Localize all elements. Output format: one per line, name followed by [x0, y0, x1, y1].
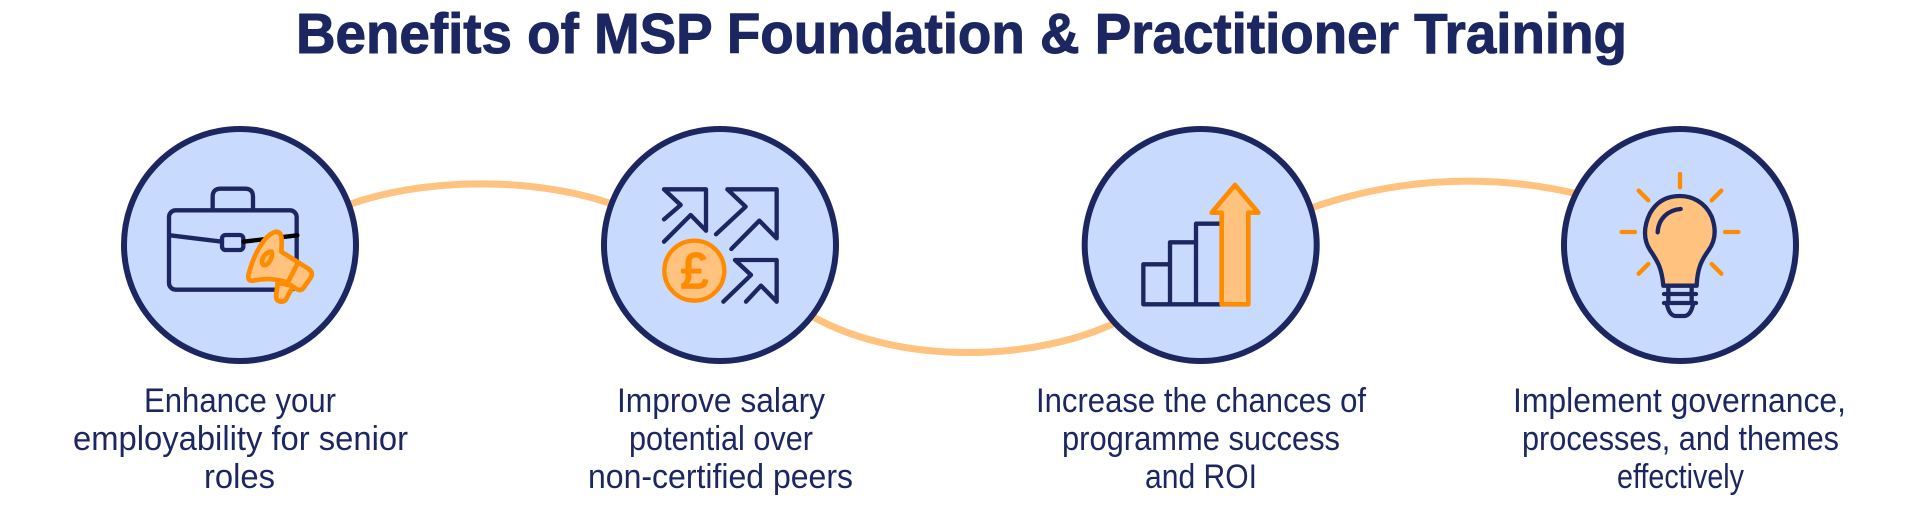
title: Benefits of MSP Foundation & Practitioner Training	[296, 2, 1627, 66]
text: programme success	[1036, 382, 1366, 496]
text: salary: Improve salary	[617, 382, 825, 420]
circle	[1564, 129, 1796, 361]
panel: salary	[588, 129, 853, 496]
icon: briefcase with megaphone	[169, 189, 312, 302]
text: employability: roles	[204, 458, 275, 496]
text: programme success: and ROI	[1145, 458, 1257, 496]
circle	[124, 129, 356, 361]
circle	[1085, 129, 1317, 361]
text: programme success: Increase the chances of	[1036, 382, 1366, 420]
text: employability: Enhance your	[144, 382, 336, 420]
text: programme success: programme success	[1062, 420, 1340, 458]
connector curves	[340, 181, 1590, 353]
text: employability: employability for senior	[73, 420, 408, 458]
panel: programme success	[1036, 129, 1366, 496]
text: governance: processes, and themes	[1522, 420, 1839, 458]
text: governance: Implement governance,	[1513, 382, 1846, 420]
icon: bar chart with arrow	[1143, 185, 1258, 304]
text: employability	[73, 382, 408, 496]
icon: arrows and pound coin: £	[680, 243, 708, 299]
text: governance: effectively	[1617, 458, 1744, 496]
panel: employability	[73, 129, 408, 496]
text: salary	[588, 382, 853, 496]
panel: governance	[1513, 129, 1846, 496]
text: salary: non-certified peers	[588, 458, 853, 496]
text: salary: potential over	[629, 420, 813, 458]
icon: arrows and pound coin	[664, 189, 777, 302]
circle	[604, 129, 836, 361]
text: governance	[1513, 382, 1846, 496]
icon: light bulb	[1622, 174, 1738, 316]
